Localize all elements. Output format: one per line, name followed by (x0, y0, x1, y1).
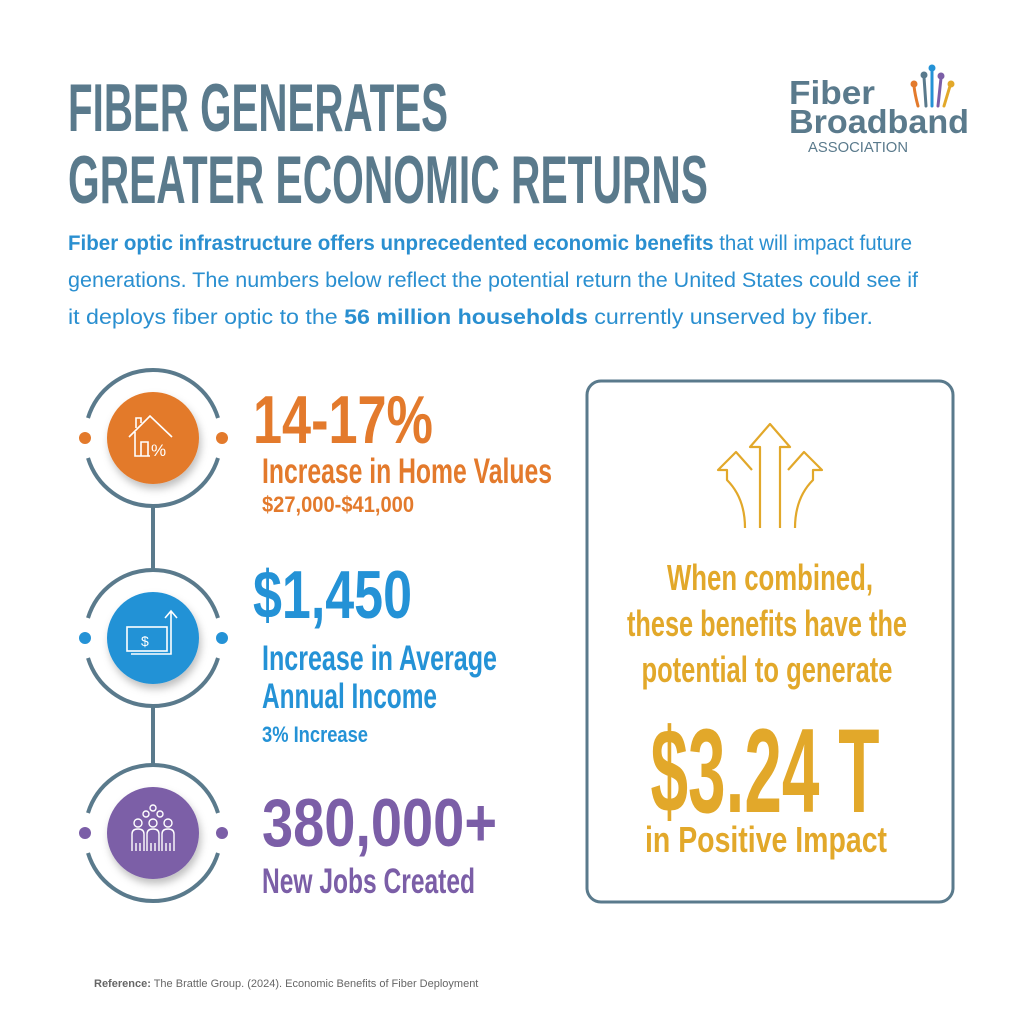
logo (789, 64, 969, 156)
logo: Broadband (789, 103, 969, 140)
intro paragraph: generations. The numbers below reflect the potential return the United States could see if (68, 269, 918, 292)
icon: arrows (718, 424, 822, 528)
stat: income: Increase in Average (262, 639, 497, 678)
stat: home values: 14-17% (253, 382, 433, 458)
intro paragraph: it deploys fiber optic to the 56 million households currently unserved by fiber. (68, 306, 873, 329)
connector line (151, 506, 155, 765)
stat: income: 3% Increase (262, 722, 368, 747)
stat: home values: Increase in Home Values (262, 452, 552, 491)
icon: money up (127, 611, 177, 654)
stat: home values (253, 382, 552, 517)
impact text: these benefits have the (627, 603, 907, 644)
icon: people (132, 805, 174, 851)
intro paragraph (68, 232, 918, 329)
circle: income (79, 570, 228, 706)
impact text: in Positive Impact (645, 819, 887, 860)
stat: jobs: 380,000+ (262, 785, 497, 861)
stat: income: $1,450 (253, 557, 412, 633)
circle: home values (79, 370, 228, 506)
title: FIBER GENERATES (68, 70, 448, 146)
logo: Fiber (789, 74, 875, 111)
panel: combined impact (587, 381, 953, 902)
stat: jobs (262, 785, 497, 901)
icon: house: % (151, 441, 166, 460)
icon: house (129, 416, 172, 460)
icon: money up: $ (141, 633, 149, 649)
title (68, 70, 708, 218)
stat: income (253, 557, 497, 747)
circle: jobs (79, 765, 228, 901)
reference: Reference: The Brattle Group. (2024). Economic Benefits of Fiber Deployment (94, 978, 478, 990)
intro paragraph: Fiber optic infrastructure offers unprecedented economic benefits that will impact future (68, 232, 912, 255)
impact text: When combined, (667, 557, 873, 598)
logo: ASSOCIATION (808, 139, 908, 156)
stat: home values: $27,000-$41,000 (262, 492, 414, 517)
stat: income: Annual Income (262, 677, 437, 716)
impact text: potential to generate (642, 649, 892, 690)
stat: jobs: New Jobs Created (262, 862, 475, 901)
impact text (627, 557, 907, 860)
